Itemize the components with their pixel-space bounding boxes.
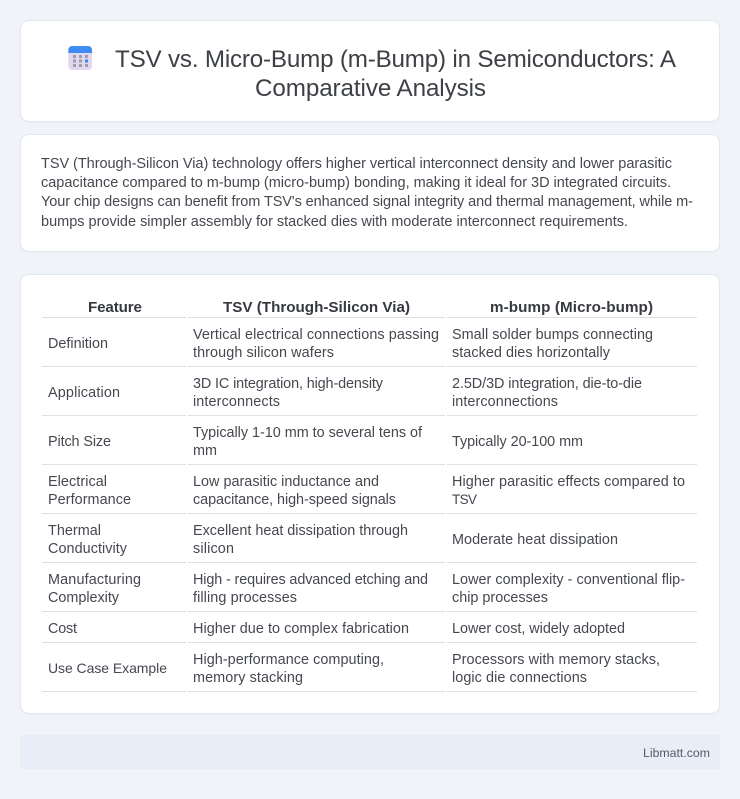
row: thermal conductivity: Conductivity [48,541,128,557]
panel: comparison table [20,274,720,714]
row: use case example: Processors with memory stacks, [452,652,660,668]
row: use case example: Use Case Example [48,660,167,676]
row: electrical performance: capacitance, high-speed signals [193,492,396,508]
row: cost: Lower cost, widely adopted [452,621,625,637]
row: cost: Higher due to complex fabrication [193,621,409,637]
row: cost: Cost [48,621,77,637]
footer [20,735,720,769]
row: application: 3D IC integration, high-density [193,376,384,392]
row: use case example [48,652,660,686]
panel: header [20,20,720,122]
row: manufacturing complexity: filling processes [193,590,297,606]
row: cost [48,621,625,637]
row: electrical performance: Higher parasitic effects compared to [452,474,685,490]
row: thermal conductivity: silicon [193,541,234,557]
title: Comparative Analysis [255,75,486,102]
panel: introduction [20,134,720,252]
text block: introduction: TSV (Through-Silicon Via) technology offers higher vertical interconnect density and lower parasitic [41,156,672,172]
row: pitch size: Typically 1-10 mm to several tens of [193,425,423,441]
footer credit: Libmatt.com [643,746,710,760]
row: thermal conductivity: Excellent heat dissipation through [193,523,408,539]
row: pitch size [48,425,583,459]
table row lines [42,317,697,692]
title [115,46,677,102]
row: manufacturing complexity: High - requires advanced etching and [193,572,428,588]
row: thermal conductivity: Thermal [48,523,101,539]
row: electrical performance: TSV [452,492,477,507]
row: manufacturing complexity: chip processes [452,590,548,606]
row: manufacturing complexity: Manufacturing [48,572,141,588]
row: definition: stacked dies horizontally [452,345,611,361]
row: application [48,376,642,410]
row: manufacturing complexity: Lower complexity - conventional flip- [452,572,685,588]
row: manufacturing complexity: Complexity [48,590,120,606]
text block: introduction: Your chip designs can benefit from TSV's enhanced signal integrity and thermal management, while m- [41,194,693,210]
row: use case example: High-performance computing, [193,652,384,668]
icon: calendar [68,46,92,70]
row: thermal conductivity [48,523,618,557]
row: pitch size: mm [193,443,217,459]
row: application: interconnects [193,394,280,410]
text block: introduction [41,156,693,230]
row: application: 2.5D/3D integration, die-to-die [452,376,642,392]
table header row [88,299,653,316]
row: definition: Definition [48,336,108,352]
text block: introduction: bumps provide simpler assembly for stacked dies with moderate interconnect requirements. [41,214,628,230]
row: thermal conductivity: Moderate heat dissipation [452,532,618,548]
row: electrical performance: Electrical [48,474,107,490]
text block: introduction: capacitance compared to m-bump (micro-bump) bonding, making it ideal for 3D integrated circuits. [41,175,671,191]
row: electrical performance: Performance [48,492,131,508]
row: pitch size: Pitch Size [48,434,111,450]
row: application: interconnections [452,394,558,410]
row: manufacturing complexity [48,572,685,606]
row: definition: Vertical electrical connections passing [193,327,439,343]
row: pitch size: Typically 20-100 mm [452,434,583,450]
row: electrical performance [48,474,685,508]
title: TSV vs. Micro-Bump (m-Bump) in Semiconductors: A [115,46,677,73]
row: application: Application [48,385,120,401]
row: use case example: logic die connections [452,670,587,686]
row: use case example: memory stacking [193,670,303,686]
row: definition: Small solder bumps connecting [452,327,653,343]
table header row: m-bump (Micro-bump) [490,299,653,316]
row: definition [48,327,653,361]
table header row: Feature [88,299,142,316]
row: electrical performance: Low parasitic inductance and [193,474,379,490]
row: definition: through silicon wafers [193,345,334,361]
table header row: TSV (Through-Silicon Via) [223,299,410,316]
